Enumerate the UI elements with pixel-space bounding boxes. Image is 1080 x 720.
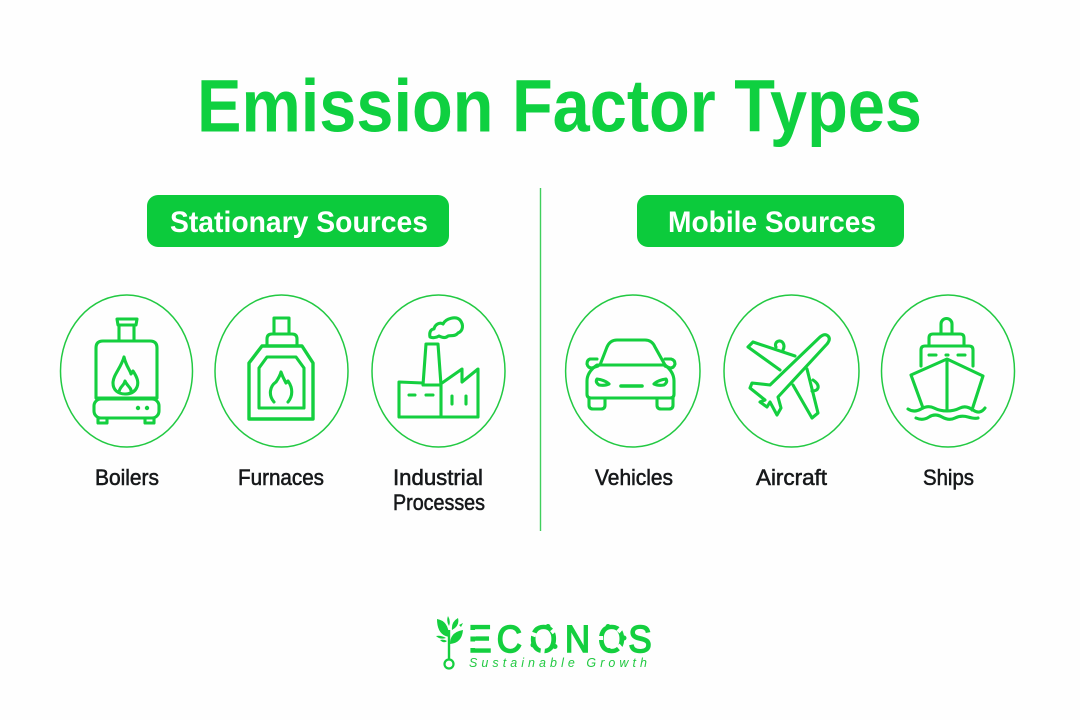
icon: aircraft (724, 295, 859, 447)
icon: furnace (215, 295, 348, 447)
label: ships: Ships (923, 465, 974, 490)
label: furnaces: Furnaces (238, 465, 324, 490)
heading: mobile sources (637, 195, 904, 247)
icon: ship (882, 295, 1014, 447)
label: industrial processes: Processes (393, 490, 485, 515)
label: vehicles: Vehicles (595, 465, 673, 490)
heading: mobile sources: Mobile Sources (668, 206, 876, 239)
panel: mobile sources (566, 195, 1014, 490)
heading: stationary sources: Stationary Sources (170, 206, 428, 239)
icon: vehicle (566, 295, 700, 447)
icon: boiler (60, 295, 192, 447)
divider between stationary and mobile (540, 188, 542, 531)
label: industrial processes (393, 465, 485, 515)
logo: Econos (436, 616, 652, 670)
icon: sprout (436, 616, 463, 668)
title: Emission Factor Types (197, 64, 922, 148)
label: boilers: Boilers (95, 465, 159, 490)
tagline: Sustainable Growth (469, 656, 647, 670)
icon: factory (372, 295, 505, 447)
label: aircraft: Aircraft (756, 465, 827, 490)
panel: stationary sources (60, 195, 505, 515)
stylised cuts and nodes on the wordmark letters (468, 624, 626, 656)
wordmark: ECONOS (468, 618, 652, 660)
label: industrial processes: Industrial (393, 465, 483, 490)
heading: stationary sources (147, 195, 449, 247)
